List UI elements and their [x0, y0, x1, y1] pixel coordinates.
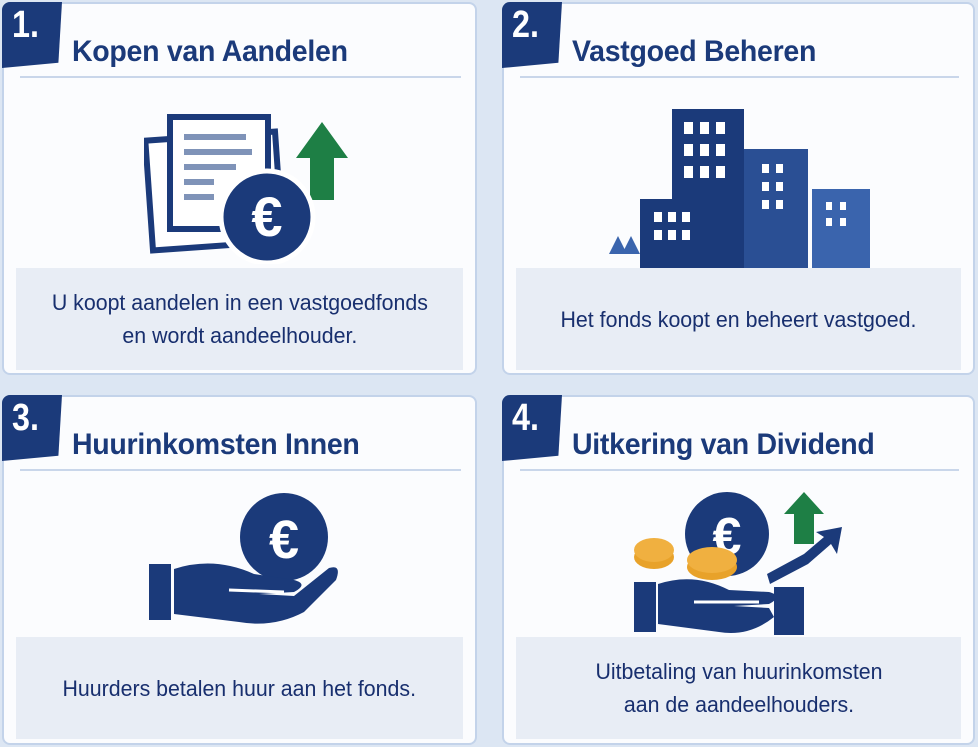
badge 1: 1. [12, 4, 39, 46]
badge 3: 3. [12, 397, 39, 439]
text box 3: Huurders betalen huur aan het fonds. [63, 676, 416, 700]
badge 4 [502, 395, 562, 461]
text box 3 [16, 637, 463, 739]
text box 4 [516, 637, 961, 739]
badge 4: 4. [512, 397, 539, 439]
panel 2: vastgoed beheren [502, 2, 975, 375]
title 4: Uitkering van Dividend [572, 428, 875, 461]
title 2: Vastgoed Beheren [572, 35, 816, 68]
text box 1: U koopt aandelen in een vastgoedfonds [51, 290, 428, 315]
text box 2: Het fonds koopt en beheert vastgoed. [561, 306, 916, 332]
badge 2: 2. [512, 4, 539, 46]
text box 2 [516, 268, 961, 370]
text box 4: aan de aandeelhouders. [623, 692, 854, 717]
panel 1: kopen van aandelen [2, 2, 477, 375]
title 1: Kopen van Aandelen [72, 35, 348, 68]
icon: buildings [609, 109, 870, 268]
text box 1: en wordt aandeelhouder. [122, 323, 357, 348]
badge 2 [502, 2, 562, 68]
panel 3: huurinkomsten innen [2, 395, 477, 745]
icon: hand holding euro coin: € [269, 510, 299, 570]
icon: hand with coins and rising arrow [634, 492, 842, 635]
panel 4: uitkering van dividend [502, 395, 975, 745]
text box 4: Uitbetaling van huurinkomsten [595, 659, 882, 684]
icon: hand holding euro coin [149, 493, 338, 624]
badge 1 [2, 2, 62, 68]
title 3: Huurinkomsten Innen [72, 428, 360, 461]
text box 1 [16, 268, 463, 370]
icon: documents with euro and green arrow [144, 114, 348, 260]
icon: documents with euro and green arrow: € [251, 185, 283, 248]
badge 3 [2, 395, 62, 461]
icon: hand with coins and rising arrow: € [713, 508, 741, 566]
